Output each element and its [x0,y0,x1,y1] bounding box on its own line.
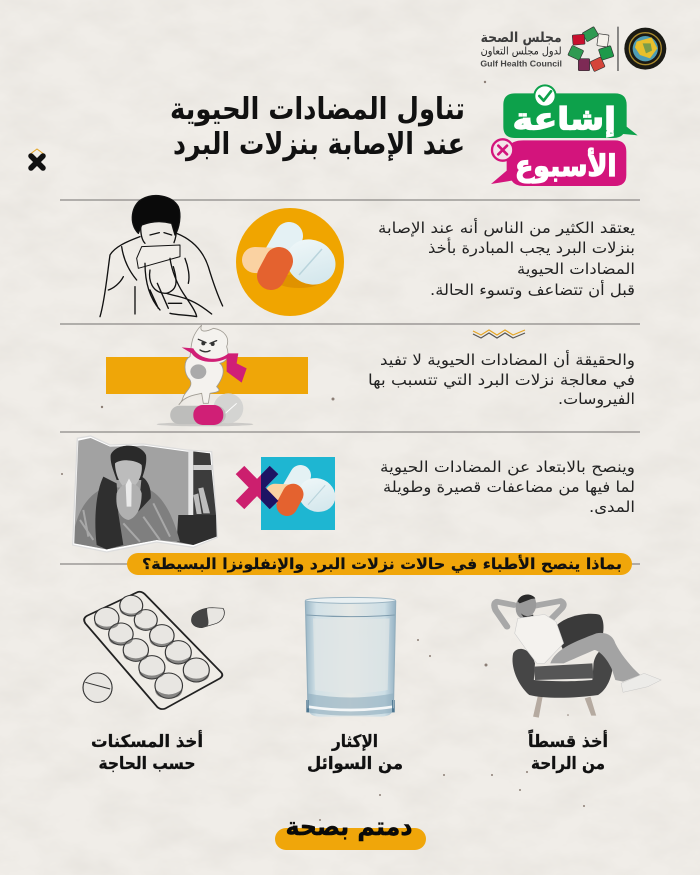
text: advice paragraph: لما فيها من مضاعفات قصيرة وطويلة [383,478,635,496]
caption: get rest: من الراحة [531,754,605,774]
icon: black x mark [29,149,45,168]
title: تناول المضادات الحيوية [170,92,465,127]
illustration: glass of water [305,597,396,717]
germ face [198,339,217,352]
title [170,92,465,162]
caption: get rest: أخذ قسطاً [528,728,608,752]
illustration: germ on pills [157,325,253,426]
caption: drink fluids: من السوائل [307,754,403,774]
badge: green bubble [503,85,638,138]
illustration: man relaxing in armchair [494,595,661,718]
chair [512,614,613,718]
text: advice paragraph: المدى. [589,498,635,516]
photo: sick man in scarf [73,436,217,552]
footer: stay healthy [275,812,426,850]
text: rumour paragraph [378,218,635,299]
caption: take painkillers [91,730,203,774]
divider lines [60,200,640,564]
logo: flag star [568,27,614,72]
logo divider [616,27,620,71]
badge: green bubble: إشاعة [513,102,616,137]
badge: magenta bubble [491,139,626,186]
text: advice paragraph: وينصح بالابتعاد عن المضادات الحيوية [380,458,635,476]
icon: zigzag ornament [473,330,525,338]
text: rumour paragraph: قبل أن تتضاعف وتسوء الحالة. [430,280,635,299]
logo: GCC emblem [624,28,666,70]
footer: stay healthy: دمتم بصحة [286,812,413,841]
caption: take painkillers: حسب الحاجة [98,754,196,774]
icon: pills on teal square crossed out [240,457,341,530]
germ body [179,325,228,405]
illustration: painkiller blister pack [83,592,224,709]
logo text: مجلس الصحة [481,30,562,46]
text: truth paragraph [368,350,635,408]
germ belly mark [190,364,206,379]
caption: get rest [528,728,608,774]
germ cape [182,347,247,383]
caption: take painkillers: أخذ المسكنات [91,730,203,752]
logo text: لدول مجلس التعاون [481,45,562,58]
text: truth paragraph: والحقيقة أن المضادات الحيوية لا تفيد [380,350,635,369]
logo text: Gulf Health Council [480,59,562,69]
text: rumour paragraph: بنزلات البرد يجب المبادرة بأخذ [428,237,635,257]
text: truth paragraph: في معالجة نزلات البرد التي تتسبب بها [368,371,635,390]
heading strip: what doctors advise: بماذا ينصح الأطباء في حالات نزلات البرد والإنفلونزا البسيطة؟ [142,555,622,573]
pills under germ [157,393,253,426]
text: advice paragraph [380,458,635,516]
man [494,595,661,692]
caption: drink fluids: الإكثار [331,732,378,752]
orange bar [106,357,308,394]
icon: pills on orange circle [236,208,344,316]
badge: rumour of the week [491,85,638,186]
caption: drink fluids [307,732,403,774]
logo text [480,30,562,69]
badge: magenta bubble: الأسبوع [515,148,617,183]
title: عند الإصابة بنزلات البرد [173,127,465,162]
logo: Gulf Health Council [480,27,666,72]
text: truth paragraph: الفيروسات. [558,390,635,408]
illustration: man sneezing line art [100,196,223,317]
text: rumour paragraph: يعتقد الكثير من الناس أنه عند الإصابة [378,218,635,237]
text: rumour paragraph: المضادات الحيوية [517,260,635,278]
